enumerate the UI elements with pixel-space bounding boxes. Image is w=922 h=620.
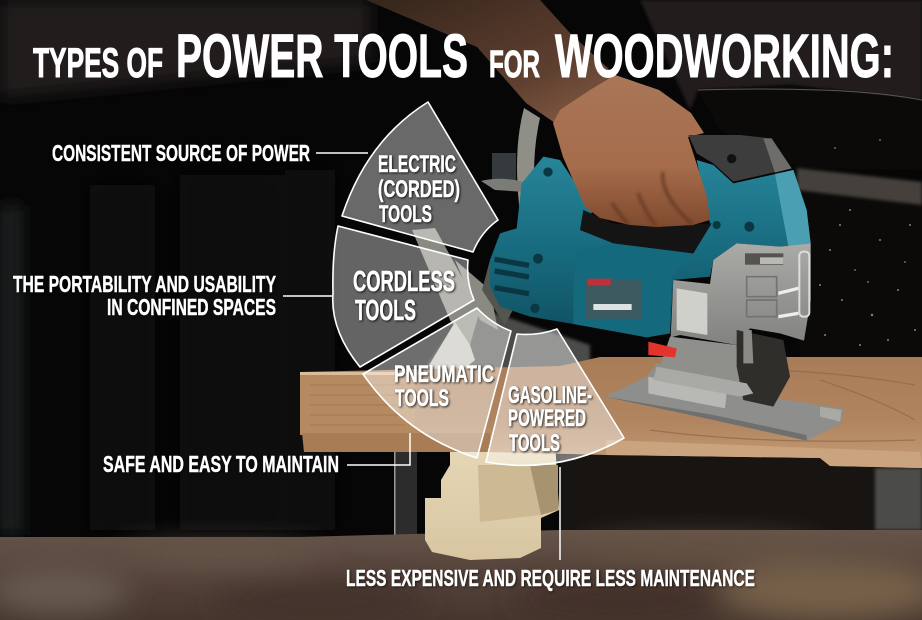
label: cordless benefit: IN CONFINED SPACES <box>107 294 276 320</box>
segment: electric: ELECTRIC <box>378 151 456 178</box>
title: TYPES OF <box>33 39 163 86</box>
metal post under board <box>395 452 417 536</box>
jigsaw silver housing <box>671 243 811 345</box>
jigsaw handle top <box>688 135 792 182</box>
segment: gasoline: TOOLS <box>509 430 560 457</box>
infographic wheel <box>333 102 624 465</box>
segment: pneumatic: PNEUMATIC <box>394 361 494 388</box>
jigsaw motor vents <box>494 167 754 313</box>
label: electric benefit: CONSISTENT SOURCE OF POWER <box>52 140 310 166</box>
forearm <box>366 0 659 125</box>
under-board dark area <box>560 455 922 535</box>
hand <box>553 75 710 227</box>
jigsaw <box>490 157 843 441</box>
label: cordless benefit: THE PORTABILITY AND USABILITY <box>13 271 276 297</box>
label: cordless benefit <box>13 271 276 320</box>
segment: pneumatic <box>363 308 511 458</box>
jigsaw base plate <box>605 363 843 441</box>
segment: gasoline <box>486 329 624 465</box>
title: POWER TOOLS <box>176 22 468 90</box>
jigsaw red guard <box>648 342 677 357</box>
saw guard and knob <box>481 108 540 240</box>
segment: gasoline: POWERED <box>508 405 586 432</box>
segment: cordless: CORDLESS <box>353 266 455 298</box>
segment: electric: TOOLS <box>379 201 432 228</box>
right dark wall <box>800 190 922 360</box>
jigsaw label plate <box>586 279 641 319</box>
jigsaw lower casting <box>660 337 743 387</box>
jigsaw blade clamp <box>737 330 790 407</box>
segment: pneumatic: TOOLS <box>395 385 449 412</box>
segment: gasoline: GASOLINE- <box>508 382 592 409</box>
jigsaw barrel band <box>573 243 693 337</box>
wooden board <box>300 357 922 468</box>
wooden spindle <box>425 440 559 560</box>
sawdust speckles <box>819 139 916 346</box>
title: FOR <box>489 44 540 86</box>
jigsaw body <box>490 157 811 337</box>
table surface <box>0 530 922 620</box>
shirt <box>640 0 922 110</box>
segment: cordless <box>333 226 474 367</box>
saw blade seen through panel <box>412 228 518 385</box>
title <box>33 22 894 90</box>
segment: electric <box>342 102 498 252</box>
label: pneumatic benefit: SAFE AND EASY TO MAINTAIN <box>103 451 339 477</box>
jigsaw grip <box>580 210 712 253</box>
background strip behind the saw <box>797 168 922 205</box>
leader lines <box>283 153 560 560</box>
grey haze behind lower wedges <box>420 305 590 376</box>
segment: cordless: TOOLS <box>355 295 416 327</box>
segment: electric: (CORDED) <box>378 176 460 203</box>
